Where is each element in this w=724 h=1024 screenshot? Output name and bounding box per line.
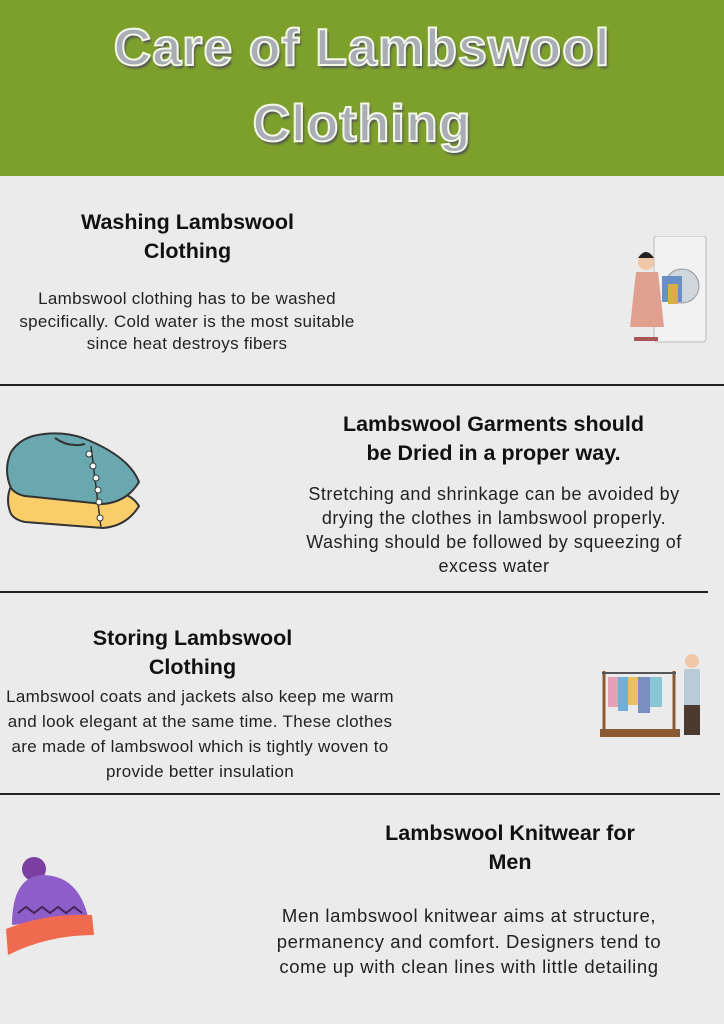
section 3: storing — [6, 626, 700, 781]
text: knitwear: Men lambswool knitwear aims at structure, — [282, 905, 656, 926]
title: Care of Lambswool — [114, 19, 610, 77]
heading: knitwear — [385, 821, 635, 874]
text: washing: Lambswool clothing has to be washed — [38, 289, 336, 308]
text: storing — [6, 687, 394, 781]
text: washing: since heat destroys fibers — [87, 334, 287, 353]
heading: knitwear: Lambswool Knitwear for — [385, 821, 635, 845]
heading: storing — [93, 626, 292, 679]
text: drying: drying the clothes in lambswool properly. — [322, 508, 666, 528]
icon: woman at washing machine — [630, 236, 706, 342]
section 4: knitwear — [6, 821, 661, 977]
heading: drying: be Dried in a proper way. — [366, 441, 621, 465]
icon: folded sweaters — [6, 432, 140, 529]
text: drying: excess water — [438, 556, 550, 576]
title: Clothing — [253, 95, 471, 153]
text: drying: Stretching and shrinkage can be avoided by — [308, 484, 680, 504]
text: knitwear: come up with clean lines with little detailing — [279, 956, 659, 977]
heading: drying: Lambswool Garments should — [343, 412, 644, 436]
text: washing: specifically. Cold water is the most suitable — [19, 312, 355, 330]
text: washing — [19, 289, 355, 353]
heading: washing: Washing Lambswool — [81, 210, 294, 234]
section 2: drying — [6, 412, 682, 576]
heading: knitwear: Men — [488, 850, 532, 874]
title — [114, 19, 610, 156]
text: storing: are made of lambswool which is tightly woven to — [12, 737, 388, 756]
heading: washing: Clothing — [144, 239, 231, 263]
text: storing: Lambswool coats and jackets also keep me warm — [6, 687, 394, 706]
text: storing: and look elegant at the same time. These clothes — [8, 712, 392, 731]
text: knitwear — [277, 905, 661, 977]
text: storing: provide better insulation — [106, 762, 294, 781]
text: drying — [306, 484, 682, 576]
text: knitwear: permanency and comfort. Designers tend to — [277, 930, 661, 952]
text: drying: Washing should be followed by squeezing of — [306, 532, 682, 552]
icon: clothes rack — [600, 654, 700, 737]
header banner — [0, 0, 724, 176]
heading: washing — [81, 210, 294, 263]
section 1: washing — [19, 210, 706, 353]
heading: storing: Clothing — [149, 655, 236, 679]
heading: storing: Storing Lambswool — [93, 626, 292, 650]
heading: drying — [343, 412, 644, 465]
icon: beanie hat — [6, 857, 94, 955]
